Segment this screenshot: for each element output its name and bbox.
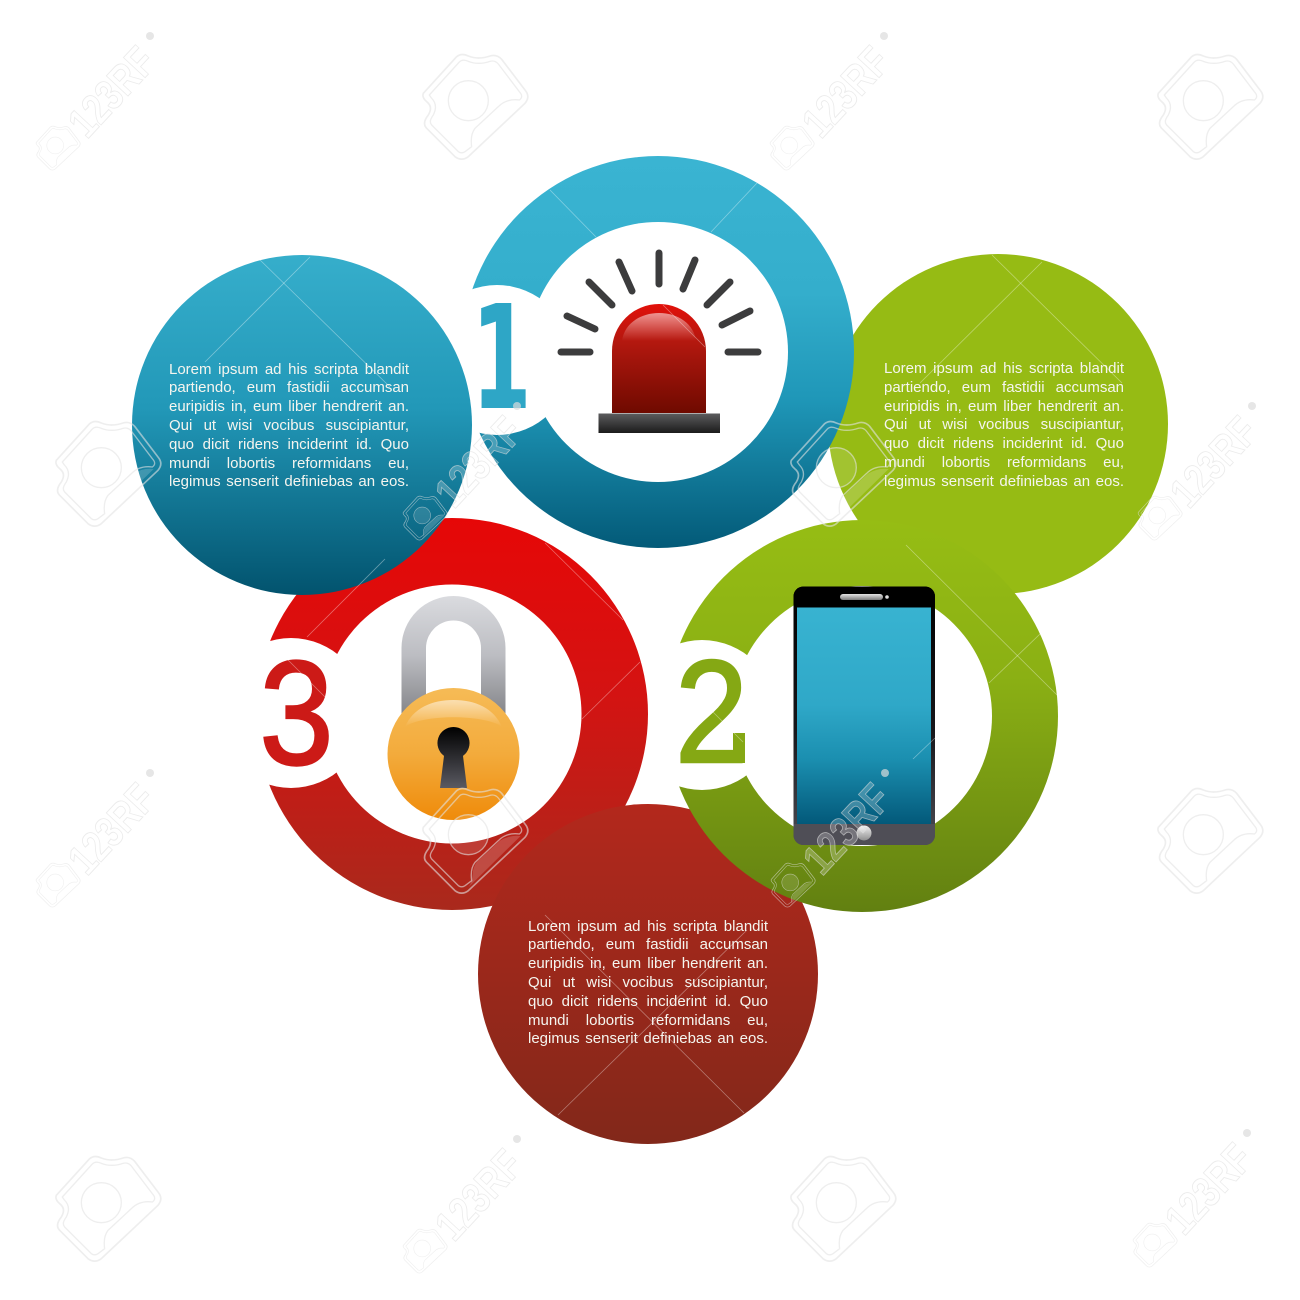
text block: blue panel: partiendo, eum fastidii accumsan xyxy=(169,379,409,396)
text block: green panel: partiendo, eum fastidii accumsan xyxy=(884,379,1124,396)
text block: red panel: quo dicit ridens inciderint id. Quo xyxy=(528,993,768,1010)
phone home button xyxy=(856,826,872,840)
phone speaker xyxy=(840,594,883,600)
text block: red panel: legimus senserit definiebas an eos. xyxy=(528,1030,768,1047)
number 1: 1 xyxy=(471,276,532,443)
thin diagonal guide lines xyxy=(205,183,1122,1115)
siren dome xyxy=(612,304,706,413)
text block: red panel xyxy=(528,918,768,1047)
text block: green panel: mundi lobortis reformidans eu, xyxy=(884,454,1124,471)
number 3: 3 xyxy=(259,631,334,796)
phone body xyxy=(794,586,935,845)
padlock highlight xyxy=(405,700,502,727)
phone screen xyxy=(797,608,931,824)
text block: blue panel: mundi lobortis reformidans eu, xyxy=(169,455,409,472)
siren base xyxy=(598,414,720,433)
siren dome highlight xyxy=(622,313,696,341)
text block: green panel: Qui ut wisi vocibus suscipiantur, xyxy=(884,416,1124,433)
ring: step 2 green xyxy=(666,520,1058,912)
text block: green panel: quo dicit ridens inciderint id. Quo xyxy=(884,435,1124,452)
icon: padlock xyxy=(388,596,520,820)
phone bottom bezel xyxy=(794,824,935,845)
padlock keyhole xyxy=(437,727,470,788)
text block: red panel: Qui ut wisi vocibus suscipiantur, xyxy=(528,974,768,991)
siren light rays xyxy=(561,253,758,352)
phone camera dot xyxy=(885,595,889,599)
icon: smartphone xyxy=(794,586,935,845)
text block: blue panel: euripidis in, eum liber hendrerit an. xyxy=(169,398,409,415)
text block: green panel: euripidis in, eum liber hendrerit an. xyxy=(884,398,1124,415)
text block: green panel: Lorem ipsum ad his scripta blandit xyxy=(884,360,1124,377)
text block: blue panel: Qui ut wisi vocibus suscipiantur, xyxy=(169,417,409,434)
circle: red text panel xyxy=(478,804,818,1144)
padlock body xyxy=(388,688,520,820)
padlock shackle xyxy=(402,596,506,715)
text block: red panel: mundi lobortis reformidans eu, xyxy=(528,1012,768,1029)
ring: step 3 red xyxy=(256,518,648,910)
phone top bezel xyxy=(794,586,935,607)
text block: green panel xyxy=(884,360,1124,490)
text block: blue panel: legimus senserit definiebas an eos. xyxy=(169,473,409,490)
text block: blue panel: quo dicit ridens inciderint id. Quo xyxy=(169,436,409,453)
ring: step 1 blue xyxy=(462,156,854,548)
text block: blue panel xyxy=(169,360,409,490)
text block: green panel: legimus senserit definiebas an eos. xyxy=(884,473,1124,490)
text block: red panel: Lorem ipsum ad his scripta blandit xyxy=(528,918,768,934)
icon: siren xyxy=(561,253,758,433)
text block: blue panel: Lorem ipsum ad his scripta blandit xyxy=(169,360,409,378)
text block: red panel: partiendo, eum fastidii accumsan xyxy=(528,936,768,953)
number 2: 2 xyxy=(675,631,748,794)
circle: blue text panel xyxy=(132,255,472,595)
text block: red panel: euripidis in, eum liber hendrerit an. xyxy=(528,955,768,972)
circle: green text panel xyxy=(828,254,1168,594)
